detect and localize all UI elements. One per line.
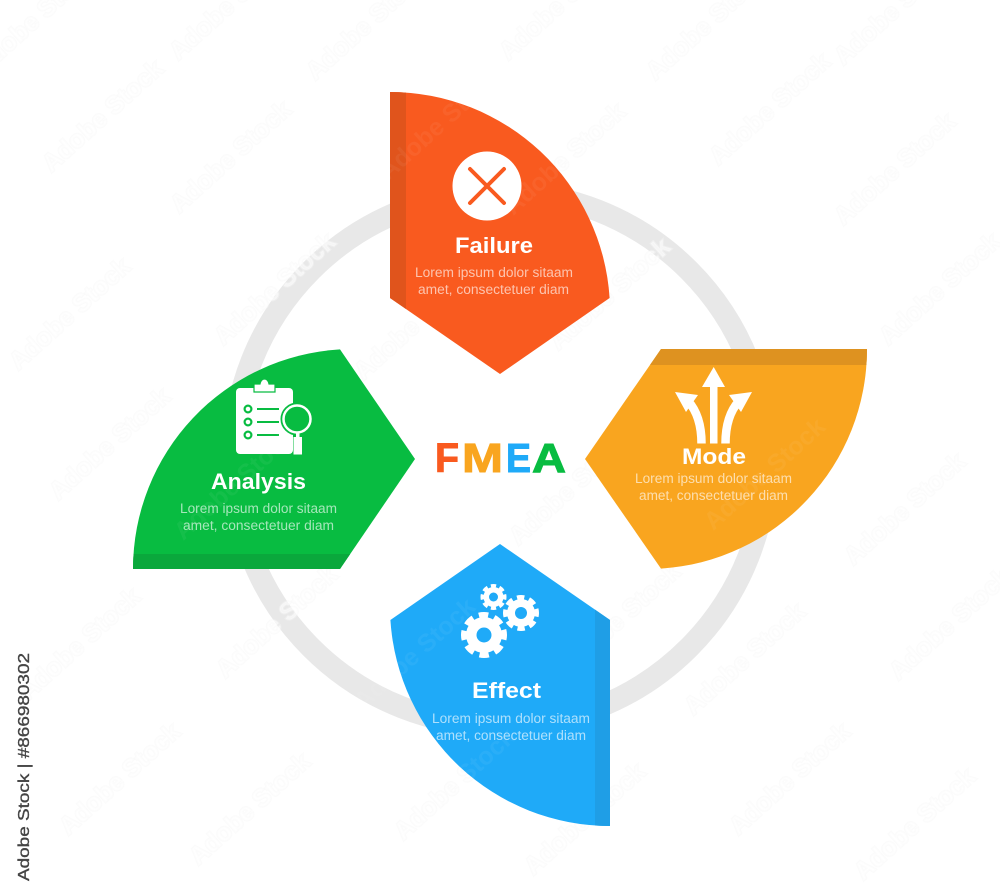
text: Adobe Stock bbox=[37, 54, 169, 178]
center title FMEA: F bbox=[435, 435, 459, 481]
mode body text bbox=[635, 471, 792, 503]
text: Adobe Stock bbox=[54, 717, 186, 841]
text: Adobe Stock bbox=[44, 382, 176, 506]
failure body text bbox=[415, 265, 573, 297]
failure body text: amet, consectetuer diam bbox=[418, 282, 569, 297]
panel: effect bbox=[390, 544, 610, 826]
failure body text: Lorem ipsum dolor sitaam bbox=[415, 265, 573, 280]
effect side band bbox=[595, 610, 610, 826]
stock id side text: Adobe Stock | #866980302 bbox=[16, 653, 33, 881]
failure heading: Failure bbox=[455, 233, 533, 258]
analysis shape bbox=[133, 349, 415, 569]
text: Adobe Stock bbox=[829, 107, 961, 231]
text: Adobe Stock bbox=[349, 262, 481, 386]
mode top band bbox=[650, 349, 867, 365]
icon: three arrows bbox=[675, 367, 752, 444]
text: Adobe Stock bbox=[724, 717, 856, 841]
effect body text bbox=[432, 711, 590, 743]
mode heading: Mode bbox=[682, 444, 746, 469]
text: Adobe Stock bbox=[499, 97, 631, 221]
mode body text: Lorem ipsum dolor sitaam bbox=[635, 471, 792, 486]
center title FMEA: A bbox=[532, 435, 566, 481]
text: Adobe Stock bbox=[839, 447, 971, 571]
center title FMEA bbox=[435, 435, 566, 481]
effect heading: Effect bbox=[472, 678, 542, 703]
panel: analysis bbox=[133, 349, 415, 569]
panel: mode bbox=[585, 349, 867, 569]
center title FMEA: M bbox=[462, 435, 503, 481]
center title FMEA: E bbox=[506, 435, 531, 481]
text: Adobe Stock bbox=[374, 62, 506, 186]
text: Adobe Stock bbox=[349, 592, 481, 716]
panel: failure bbox=[390, 92, 610, 374]
grey ring behind panels bbox=[233, 192, 767, 726]
icon: x in circle bbox=[452, 152, 522, 220]
text: Adobe Stock bbox=[4, 252, 136, 376]
analysis body text: amet, consectetuer diam bbox=[183, 518, 334, 533]
failure shape bbox=[390, 92, 610, 374]
text: Adobe Stock bbox=[389, 722, 521, 846]
text: Adobe Stock bbox=[519, 757, 651, 881]
text: Adobe Stock bbox=[849, 762, 981, 886]
mode body text: amet, consectetuer diam bbox=[639, 488, 788, 503]
failure side band bbox=[390, 92, 406, 309]
effect body text: amet, consectetuer diam bbox=[436, 728, 586, 743]
text: Adobe Stock bbox=[211, 560, 343, 684]
icon: clipboard and magnifier bbox=[236, 379, 312, 454]
text: Adobe Stock bbox=[504, 427, 636, 551]
text: Adobe Stock bbox=[209, 227, 341, 351]
effect shape bbox=[390, 544, 610, 826]
icon: gears bbox=[464, 586, 536, 655]
analysis heading: Analysis bbox=[211, 469, 306, 494]
text: Adobe Stock bbox=[184, 747, 316, 871]
text: Adobe Stock bbox=[389, 722, 521, 846]
text: Adobe Stock bbox=[704, 47, 836, 171]
effect body text: Lorem ipsum dolor sitaam bbox=[432, 711, 590, 726]
text: Adobe Stock bbox=[554, 557, 686, 681]
text: Adobe Stock bbox=[699, 412, 831, 536]
analysis body text: Lorem ipsum dolor sitaam bbox=[180, 501, 337, 516]
analysis body text bbox=[180, 501, 337, 533]
text: Adobe Stock bbox=[165, 95, 297, 219]
text: Adobe Stock bbox=[499, 97, 631, 221]
text: Adobe Stock bbox=[169, 422, 301, 546]
mode shape bbox=[585, 349, 867, 569]
text: Adobe Stock bbox=[14, 582, 146, 706]
text: Adobe Stock bbox=[544, 232, 676, 356]
analysis bottom band bbox=[133, 554, 350, 569]
text: Adobe Stock bbox=[679, 597, 811, 721]
